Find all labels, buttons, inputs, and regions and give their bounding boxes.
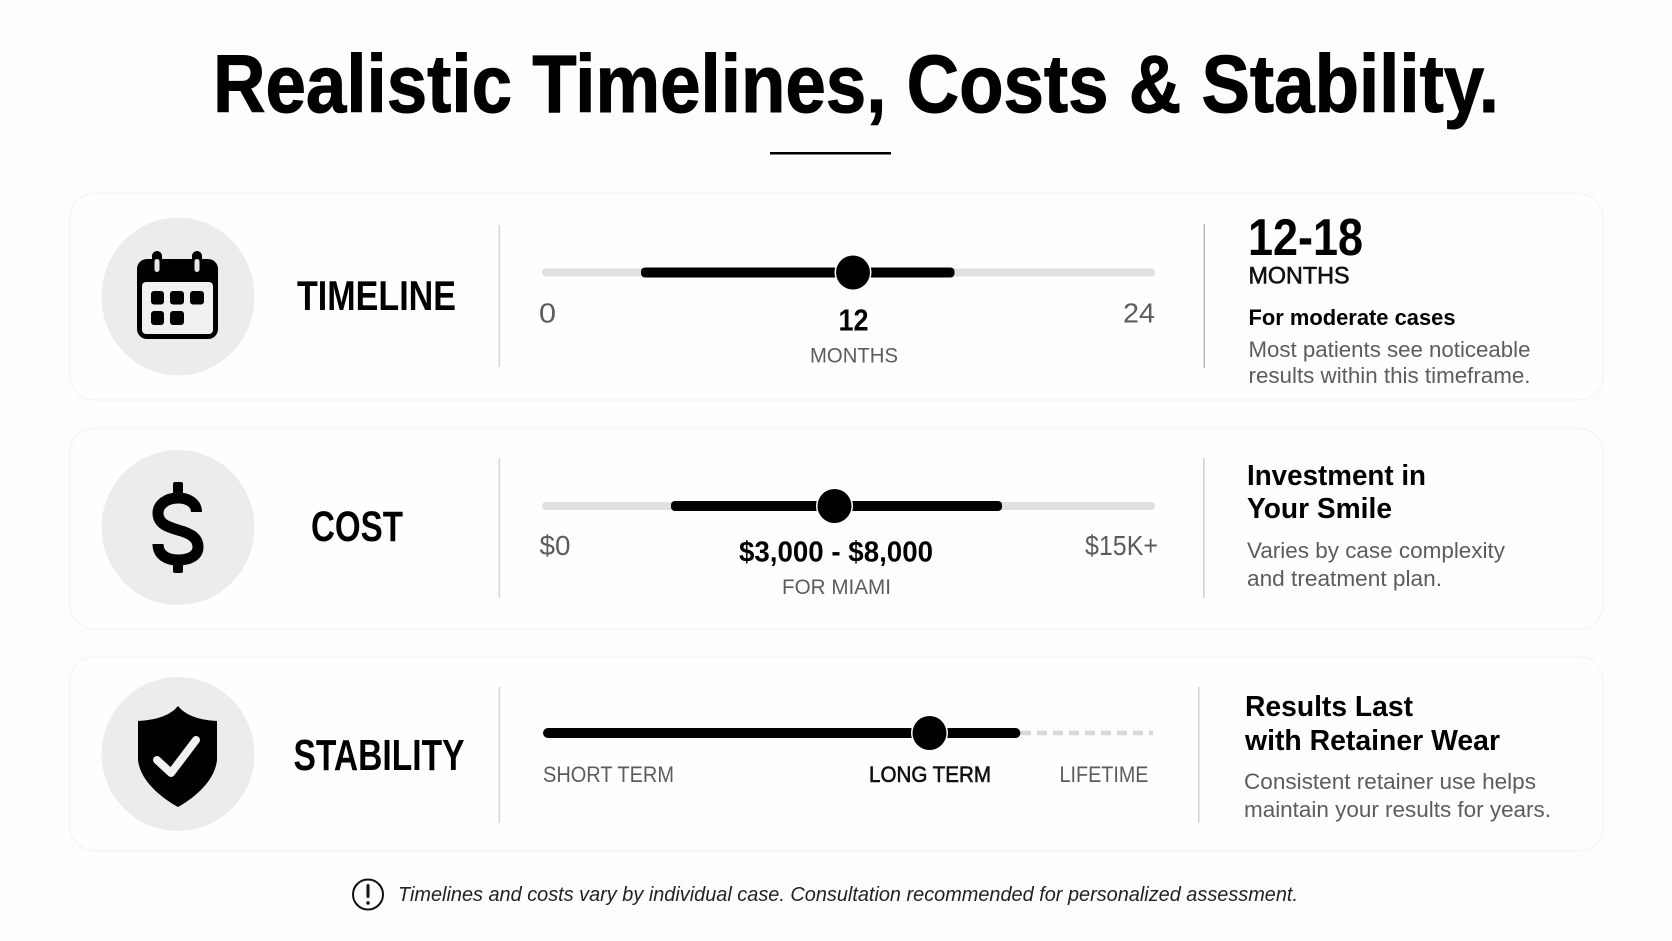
icon: exclamation circle [353, 880, 383, 910]
disclaimer text: Timelines and costs vary by individual case. Consultation recommended for personalized assessment. [398, 884, 1298, 906]
current value: 12 [838, 302, 868, 338]
subheading: Results Last [1245, 691, 1413, 723]
panel: stability [70, 657, 1603, 850]
scale maximum: 24 [1123, 298, 1155, 328]
subheading: with Retainer Wear [1244, 725, 1500, 757]
divider line [498, 225, 500, 367]
location label: FOR MIAMI [782, 575, 891, 599]
panel background [70, 428, 1603, 629]
scale maximum: $15K+ [1085, 530, 1158, 561]
scale minimum: 0 [539, 298, 556, 328]
subheading [1244, 691, 1500, 757]
divider line [498, 458, 500, 598]
heading: cost: COST [311, 503, 403, 551]
subheading: Investment in [1247, 460, 1426, 492]
slider: stability [543, 714, 1153, 752]
panel: cost [70, 428, 1603, 629]
description [1247, 538, 1506, 591]
scale label: short term: SHORT TERM [543, 762, 674, 787]
panel background [70, 194, 1603, 400]
panel background [70, 657, 1603, 850]
value unit: MONTHS [810, 344, 898, 368]
heading: stability: STABILITY [294, 731, 464, 780]
icon: dollar sign [102, 450, 254, 605]
range summary: 12-18 [1248, 209, 1363, 267]
description: Consistent retainer use helps [1244, 769, 1536, 794]
current range: $3,000 - $8,000 [739, 536, 933, 568]
description: maintain your results for years. [1244, 797, 1551, 822]
description: and treatment plan. [1247, 566, 1442, 591]
heading: timeline: TIMELINE [297, 272, 456, 319]
slider: cost [542, 488, 1155, 524]
scale label: long term: LONG TERM [869, 762, 991, 787]
description: Varies by case complexity [1247, 538, 1506, 563]
slider: timeline [542, 254, 1155, 291]
scale label: lifetime: LIFETIME [1060, 762, 1148, 787]
description: results within this timeframe. [1248, 363, 1530, 388]
description: Most patients see noticeable [1248, 337, 1530, 362]
scale minimum: $0 [540, 530, 570, 561]
divider line [1203, 458, 1204, 598]
icon: calendar [102, 218, 254, 376]
divider line [1204, 224, 1205, 368]
title underline [770, 152, 891, 154]
footer note [353, 880, 1298, 910]
subheading [1247, 460, 1426, 525]
title: Realistic Timelines, Costs & Stability. [213, 39, 1499, 130]
panel: timeline [70, 194, 1603, 400]
divider line [498, 687, 500, 823]
description [1244, 769, 1551, 822]
divider line [1198, 687, 1200, 823]
description [1248, 337, 1530, 388]
range unit: MONTHS [1248, 262, 1350, 290]
subheading: Your Smile [1247, 493, 1392, 525]
icon: shield with check [102, 677, 254, 831]
subheading: For moderate cases [1248, 305, 1456, 330]
